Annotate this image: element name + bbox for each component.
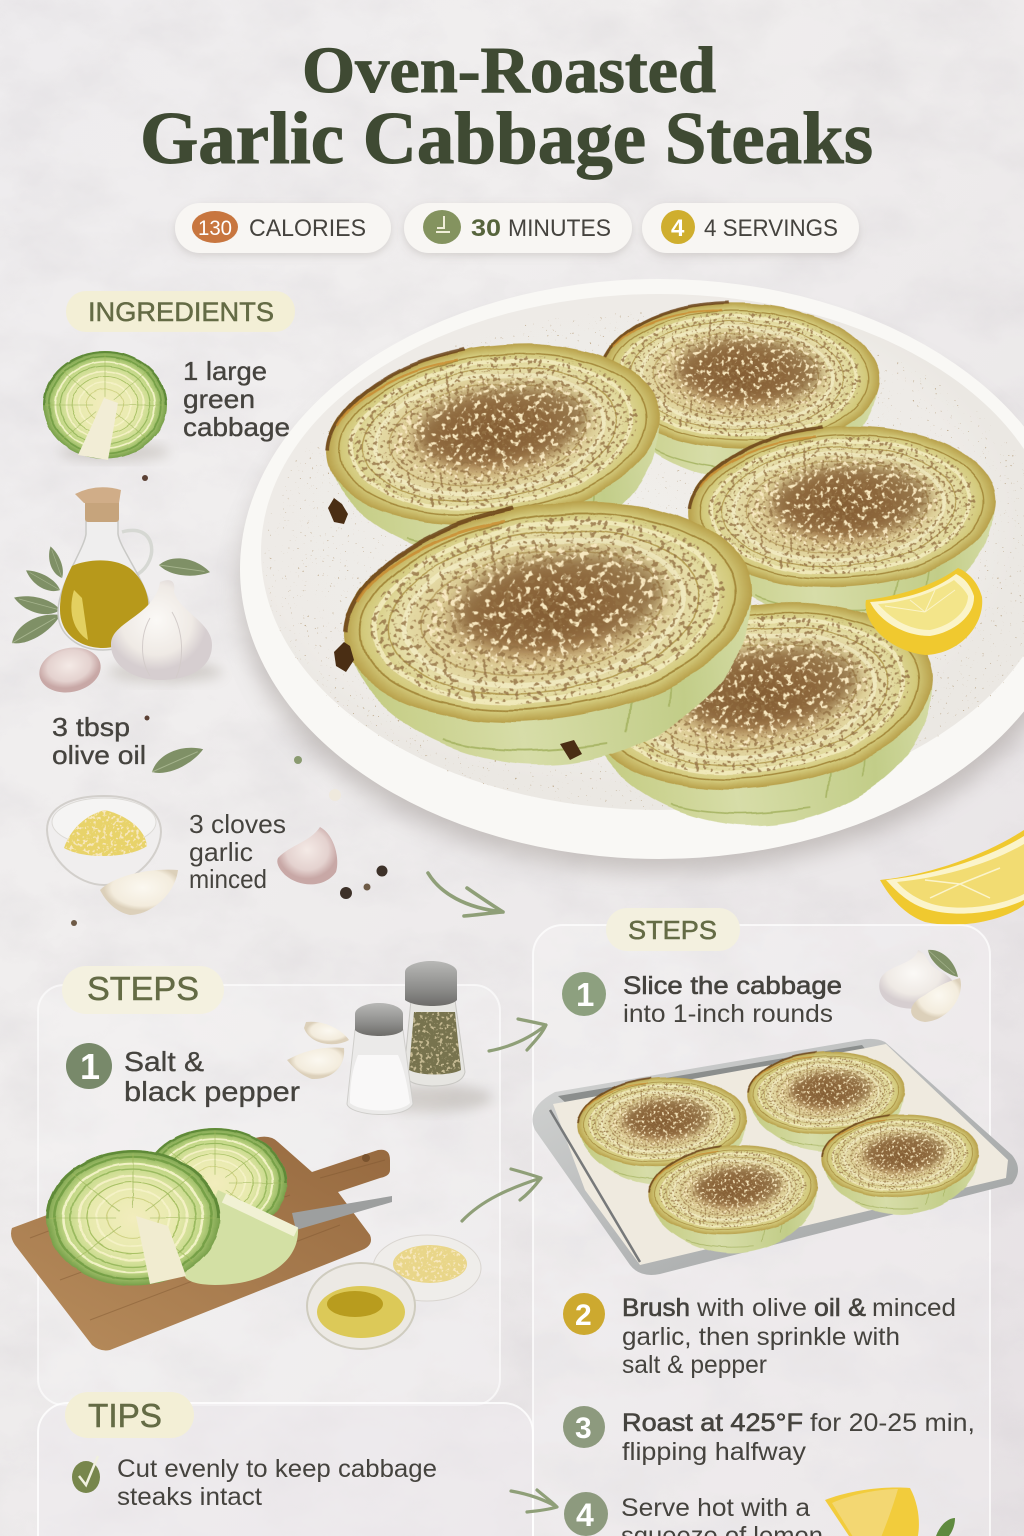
- icon: salt and pepper shakers with garlic: [287, 961, 492, 1115]
- title: Garlic Cabbage Steaks: [140, 98, 873, 180]
- text: garlic quantity: [189, 809, 286, 894]
- text: olive oil quantity: olive oil: [52, 740, 146, 770]
- heading: tips: TIPS: [88, 1397, 162, 1434]
- heading: ingredients: INGREDIENTS: [88, 297, 274, 327]
- stat pill: minutes: [404, 203, 632, 253]
- lemon wedge on plate: [866, 568, 982, 655]
- badge: step 4: 4: [576, 1497, 594, 1533]
- badge: step 1: [66, 1043, 112, 1089]
- panel: steps right: [532, 908, 1018, 1536]
- text: brush: minced: [872, 1294, 956, 1322]
- badge: step 4: [564, 1492, 608, 1536]
- badge: step 3: 3: [575, 1412, 592, 1445]
- text: olive oil quantity: [52, 712, 146, 770]
- charred edges: [328, 498, 582, 760]
- text: serve: Serve hot with a: [621, 1494, 810, 1522]
- icon: cabbage half: [43, 351, 170, 461]
- text: roast: [622, 1409, 975, 1466]
- stat pill: minutes: MINUTES: [508, 215, 611, 242]
- text: brush: with olive: [696, 1294, 807, 1322]
- arrow: to steps: [428, 873, 503, 916]
- baking tray with steaks: [532, 1039, 1018, 1275]
- icon: check leaf: [72, 1456, 100, 1493]
- text: slice: [623, 972, 842, 1028]
- badge: step 3: [563, 1406, 605, 1448]
- stat pill: servings: 4 SERVINGS: [704, 215, 838, 242]
- arrow: to tray: [462, 1169, 541, 1221]
- title: [140, 34, 873, 180]
- text: brush: [622, 1294, 956, 1379]
- text: salt and black pepper: black pepper: [124, 1076, 300, 1107]
- badge: step 2: [563, 1293, 605, 1335]
- text: tip 1: Cut evenly to keep cabbage: [117, 1455, 437, 1483]
- text: brush: Brush: [622, 1294, 690, 1322]
- text: tip 1: steaks intact: [117, 1483, 262, 1511]
- text: brush: salt & pepper: [622, 1351, 767, 1379]
- icon: bowl of minced garlic: [47, 796, 178, 915]
- panel: tips: [38, 1392, 533, 1536]
- stat pill: servings: [642, 203, 859, 253]
- icon: cutting board with cabbage and knife: [11, 1128, 392, 1350]
- text: brush: garlic, then sprinkle with: [622, 1323, 900, 1351]
- text: salt and black pepper: [124, 1046, 300, 1107]
- heading: steps: [62, 966, 224, 1014]
- text: olive oil quantity: 3 tbsp: [52, 712, 130, 742]
- stat pill: calories: CALORIES: [249, 215, 366, 242]
- text: garlic quantity: 3 cloves: [189, 809, 286, 839]
- arrow: to step 4: [511, 1490, 557, 1512]
- icon: garlic clove and peppercorns: [71, 756, 388, 926]
- icon: bowl of garlic: [373, 1235, 481, 1301]
- arrow: to step 1: [489, 1019, 546, 1051]
- text: slice: Slice the cabbage: [623, 972, 842, 1000]
- text: brush: oil &: [814, 1294, 866, 1322]
- badge: step 1: 1: [576, 976, 594, 1013]
- stat pill: calories: [175, 203, 391, 253]
- text: cabbage quantity: green: [183, 384, 255, 414]
- text: cabbage quantity: [183, 356, 290, 442]
- text: garlic quantity: garlic: [189, 837, 253, 867]
- icon: garlic: [879, 944, 963, 1022]
- heading: steps: STEPS: [628, 915, 717, 945]
- text: cabbage quantity: cabbage: [183, 412, 290, 442]
- text: roast: flipping halfway: [622, 1438, 807, 1466]
- steak: centre: [330, 477, 772, 791]
- icon: olive oil bottle, garlic and leaves: [7, 475, 223, 720]
- text: tip 1: [117, 1455, 437, 1511]
- steak: bottom: [575, 582, 950, 848]
- icon: bowl of olive oil: [307, 1263, 415, 1349]
- badge: step 2: 2: [575, 1299, 592, 1332]
- title: Oven-Roasted: [302, 34, 716, 107]
- text: roast: Roast at 425°F: [622, 1409, 803, 1437]
- text: salt and black pepper: Salt &: [124, 1046, 204, 1077]
- heading: steps: STEPS: [87, 970, 199, 1007]
- stat pill: servings: 4: [671, 215, 685, 242]
- icon: basil leaf: [148, 740, 206, 779]
- panel: steps left: [11, 961, 500, 1405]
- heading: ingredients: [66, 291, 295, 332]
- text: serve: [621, 1494, 823, 1536]
- heading: steps: [606, 908, 740, 951]
- text: slice: into 1-inch rounds: [623, 1000, 833, 1028]
- icon: lemon wedge and leaf: [825, 1488, 955, 1536]
- heading: tips: [65, 1392, 194, 1438]
- badge: step 1: 1: [80, 1046, 100, 1087]
- steak: top right: [597, 298, 882, 484]
- stat pill: calories: 130: [198, 217, 232, 240]
- plate with cabbage steaks: [240, 279, 1024, 872]
- badge: step 1: [562, 972, 606, 1016]
- text: roast: for 20-25 min,: [810, 1409, 975, 1437]
- steak: right: [684, 419, 1001, 629]
- stat pill: minutes: 30: [471, 215, 501, 242]
- lemon wedge: [880, 830, 1024, 925]
- steak: top left: [315, 324, 676, 581]
- text: cabbage quantity: 1 large: [183, 356, 267, 386]
- text: garlic quantity: minced: [189, 864, 267, 894]
